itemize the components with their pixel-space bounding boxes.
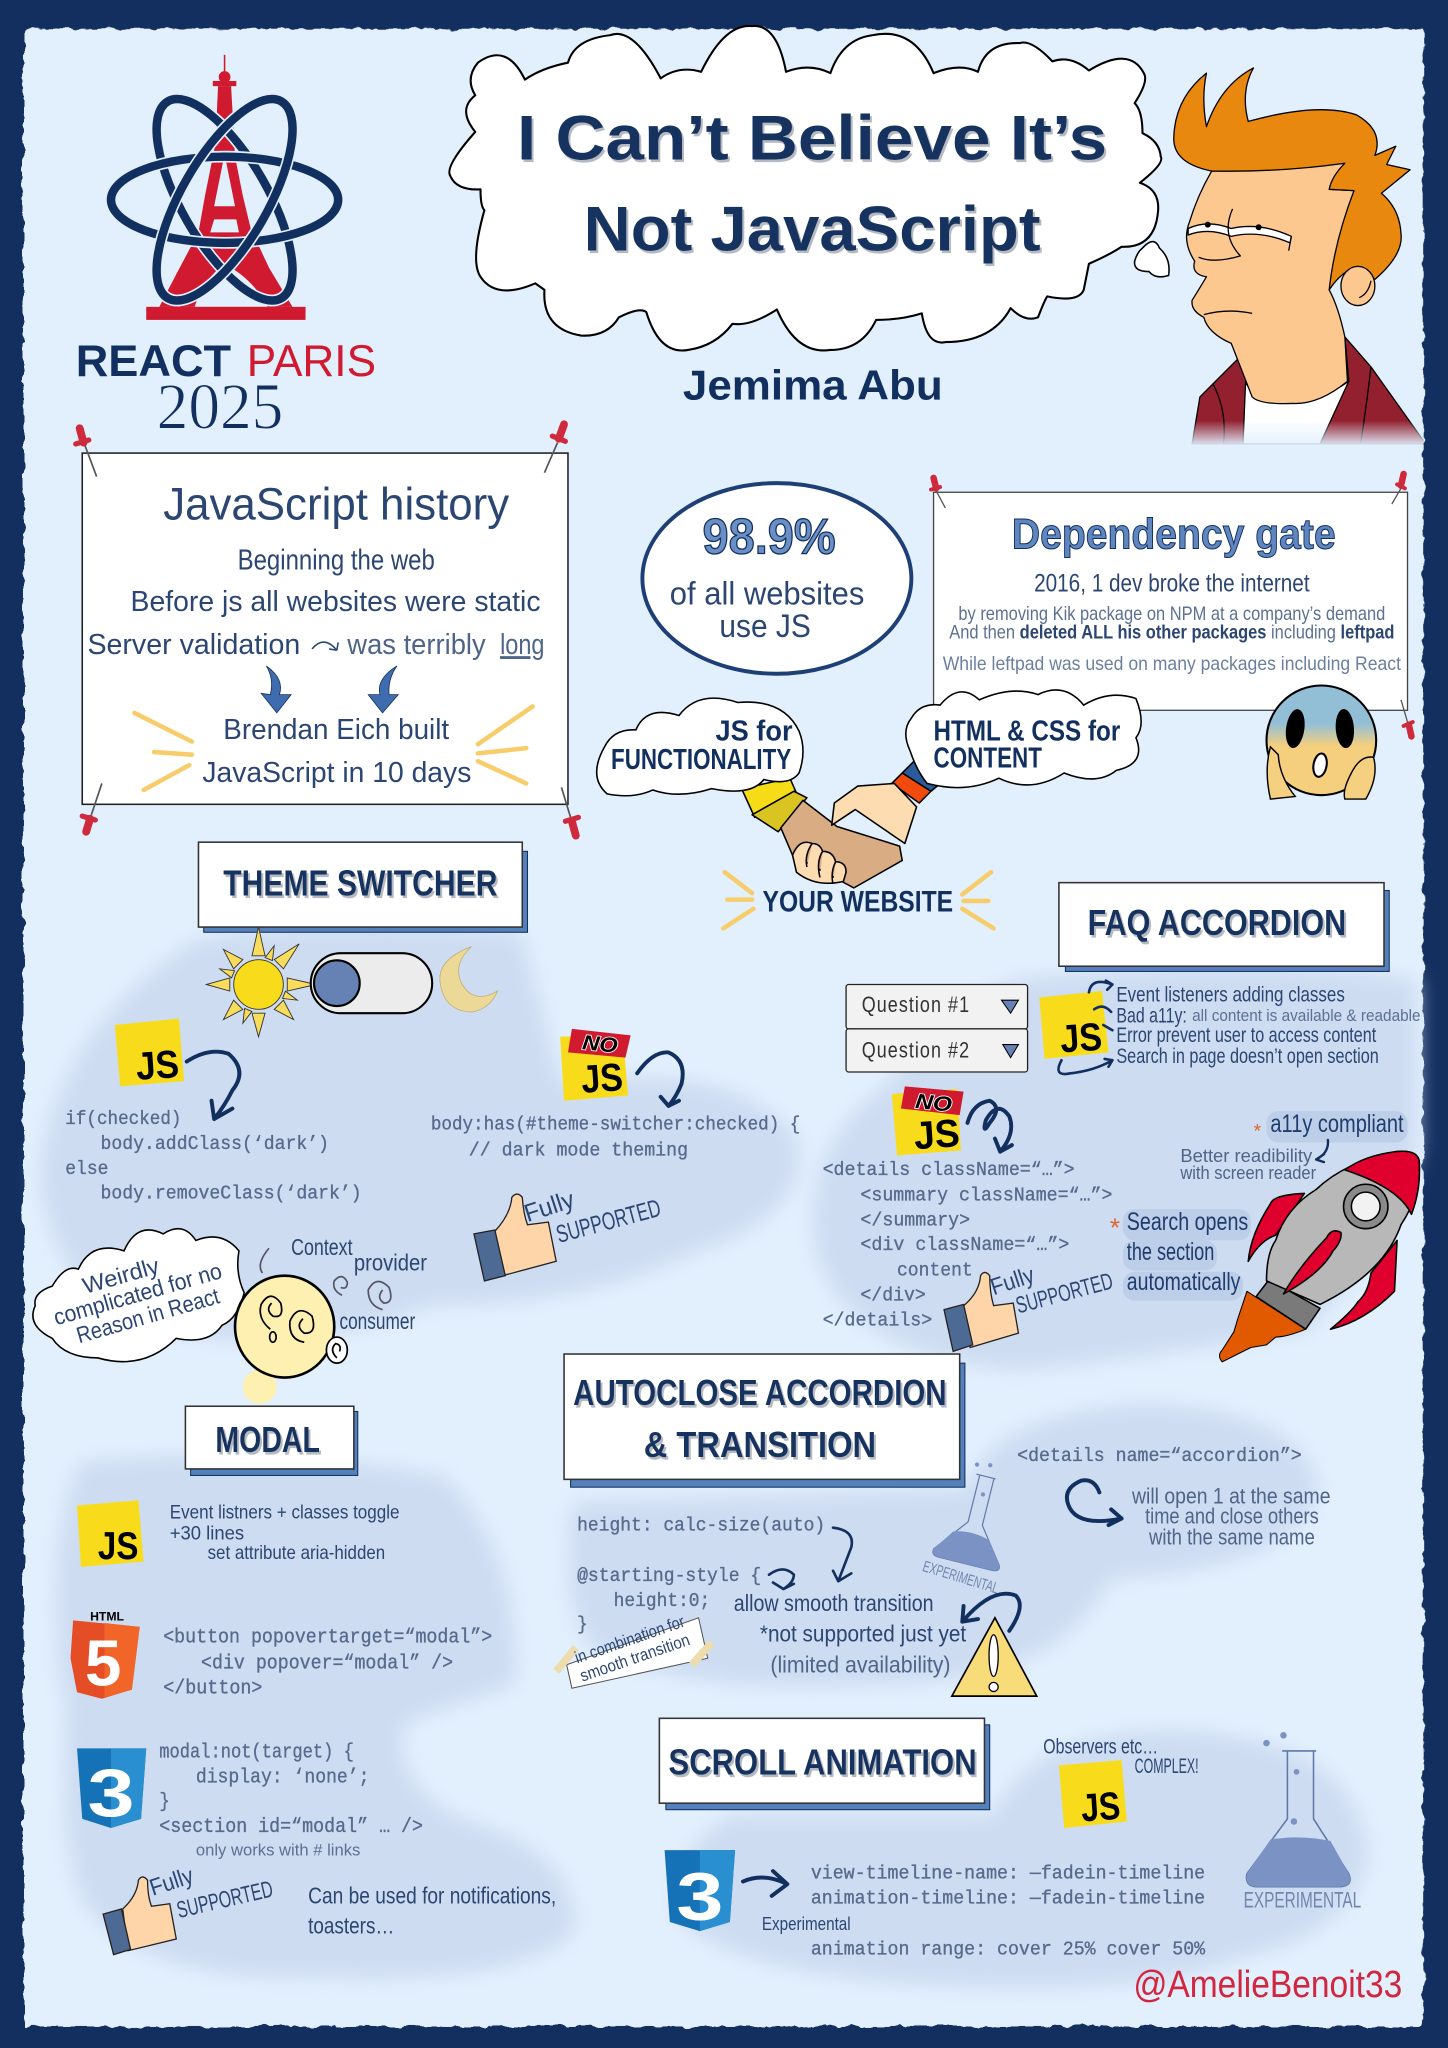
callout: search opens: Search opens: [1127, 1209, 1248, 1236]
context labels: consumer: [339, 1308, 415, 1334]
heading box: [564, 1354, 965, 1487]
NO JS badge: [560, 1029, 631, 1102]
callout: a11y compliant: Better readibility: [1180, 1145, 1313, 1166]
sparks: [723, 872, 994, 928]
code: details: </div>: [860, 1284, 926, 1306]
your website label: [723, 872, 994, 928]
fully supported label: SUPPORTED: [553, 1195, 664, 1249]
code: height: height: calc-size(auto): [577, 1514, 825, 1536]
icon: Eiffel tower: [146, 55, 306, 320]
JS drawbacks: Error prevent user to access content: [1116, 1024, 1376, 1047]
logo: React Paris 2025: [76, 55, 376, 443]
text: complicated for no: [50, 1257, 225, 1330]
code: HTML: <button popovertarget=“modal”>: [163, 1627, 492, 1650]
code: HTML: <div popover=“modal” />: [201, 1653, 453, 1676]
transition notes: [734, 1590, 967, 1678]
code: timeline: [762, 1862, 1205, 1961]
panel: JavaScript history: [76, 424, 578, 836]
heading box: FAQ ACCORDION: [1088, 902, 1346, 943]
NO JS badge: [892, 1086, 964, 1158]
cloud: weirdly complicated: [33, 1229, 244, 1362]
code: details: [823, 1159, 1112, 1331]
yellow cuff: [752, 791, 807, 832]
nose cap: [1345, 1151, 1419, 1214]
right hand: [832, 783, 917, 843]
NO JS badge: JS: [580, 1056, 624, 1102]
complex note: COMPLEX!: [1135, 1755, 1199, 1778]
section: autoclose accordion: [556, 1354, 1330, 1696]
squiggle arrow: [968, 1101, 1012, 1152]
heading box: MODAL: [215, 1419, 320, 1460]
code: height: }: [577, 1614, 588, 1636]
icon: sun: [206, 927, 316, 1037]
fully supported label: [146, 1862, 275, 1923]
heading: JavaScript history: [163, 479, 509, 530]
icon: big flask: [1246, 1732, 1350, 1887]
robe collar lines: [1213, 367, 1371, 444]
JS drawbacks: Bad a11y:: [1116, 1004, 1187, 1027]
title cloud: [449, 26, 1169, 350]
icon: HTML5: [71, 1610, 140, 1700]
section: scroll animation: [659, 1718, 1361, 1961]
accordion note: [1131, 1484, 1330, 1550]
code: details: <div className=“…”>: [860, 1234, 1069, 1256]
icon: CSS3: [77, 1748, 146, 1831]
stat caption: use JS: [719, 607, 811, 644]
blue sleeve: [902, 759, 939, 791]
JS drawbacks: [1116, 983, 1421, 1068]
handshake: [742, 759, 939, 888]
modal use note: Can be used for notifications,: [308, 1883, 556, 1909]
icon: thumbs up: [103, 1877, 176, 1955]
title line 1: I Can’t Believe It’s: [517, 103, 1107, 173]
NO JS badge: NO: [914, 1090, 953, 1117]
line: Before js all websites were static: [131, 586, 541, 618]
arrow: [743, 1871, 787, 1896]
JS notes: [170, 1502, 400, 1564]
text: FUNCTIONALITY: [611, 744, 791, 776]
code: timeline: animation-timeline: —fadein-timeline: [811, 1888, 1205, 1910]
arrow: [962, 1594, 1020, 1631]
observers note: Observers etc…: [1043, 1736, 1158, 1759]
accordion mock: [846, 985, 1028, 1072]
icon: moon: [440, 947, 497, 1012]
code: CSS version: [431, 1113, 800, 1162]
code: details name: <details name=“accordion”>: [1017, 1445, 1302, 1467]
author credit: @AmelieBenoit33: [1133, 1964, 1402, 2006]
code: HTML: [163, 1627, 492, 1701]
fully supported label: [521, 1186, 664, 1249]
code: details: content: [897, 1260, 973, 1282]
heading box: SCROLL ANIMATION: [669, 1741, 977, 1782]
JS notes: +30 lines: [170, 1522, 244, 1544]
line: Beginning the web: [238, 544, 435, 576]
code: height: height:0;: [614, 1590, 710, 1612]
code: CSS: [159, 1741, 423, 1859]
line: was terribly: [346, 629, 486, 661]
arrows: [769, 1528, 852, 1589]
JS badge: [115, 1018, 184, 1089]
eyes: [1283, 708, 1307, 749]
fully supported label: Fully: [146, 1862, 197, 1901]
pin top right: [544, 424, 565, 473]
arrow: [187, 1052, 239, 1119]
robe: [1192, 337, 1426, 444]
icon: warning: [952, 1618, 1037, 1696]
code: details: </details>: [823, 1309, 932, 1331]
arrows from JS: [1058, 981, 1112, 1074]
heading box: [185, 1406, 358, 1475]
stat number: 98.9%: [702, 509, 836, 565]
JS badge: JS: [1059, 1016, 1103, 1061]
callout: a11y compliant: [1179, 1111, 1408, 1183]
yellow sleeve: [742, 778, 799, 817]
callout: search opens: automatically: [1127, 1269, 1241, 1296]
cloud: HTML and CSS for content: [906, 690, 1141, 788]
curly arrow: [1067, 1480, 1122, 1525]
code: JS version: [65, 1108, 362, 1205]
left fin: [1248, 1193, 1304, 1261]
icon: rocket: [1220, 1151, 1419, 1362]
JS badge: JS: [1080, 1785, 1122, 1830]
icon: scared emoji: [1267, 685, 1376, 799]
icon: CSS3: [665, 1850, 735, 1934]
label: YOUR WEBSITE: [763, 885, 953, 918]
small thought puff: [1135, 242, 1169, 277]
line: While leftpad was used on many packages including React: [943, 653, 1401, 675]
accordion mock: Question #2: [862, 1038, 970, 1063]
code: CSS: modal:not(target) {: [159, 1741, 354, 1764]
cloud: [906, 690, 1141, 788]
JS notes: set attribute aria-hidden: [208, 1542, 385, 1564]
pin top left: [76, 428, 97, 477]
code: CSS: }: [159, 1791, 170, 1814]
callout: search opens: [1110, 1209, 1251, 1300]
icon: CSS3: 3: [87, 1756, 134, 1831]
code: details: </summary>: [860, 1209, 970, 1231]
context labels: Context: [291, 1234, 353, 1260]
fully supported label: Fully: [521, 1186, 578, 1228]
heading box: AUTOCLOSE ACCORDION: [573, 1372, 947, 1413]
arrow left: [261, 666, 291, 713]
icon: thumbs up: [474, 1194, 556, 1281]
fully supported label: [987, 1262, 1116, 1318]
text: Reason in React: [73, 1282, 223, 1348]
text: [44, 1236, 231, 1353]
panel: dependency gate: [931, 474, 1413, 736]
section: modal: [71, 1406, 556, 1955]
watercolor section washes: [39, 925, 1417, 1988]
code: timeline: view-timeline-name: —fadein-timeline: [811, 1862, 1205, 1884]
stat caption: of all websites: [670, 575, 864, 612]
left arm and hand: [781, 800, 902, 888]
callout: search opens: the section: [1127, 1239, 1214, 1266]
nozzle: [1256, 1280, 1320, 1329]
NO JS badge: NO: [581, 1031, 619, 1058]
JS badge: [1059, 1760, 1127, 1830]
pin bottom right: [1401, 700, 1413, 736]
stat bubble: [642, 483, 911, 674]
code: CSS: <section id=“modal” … />: [159, 1816, 423, 1839]
callout: a11y compliant: with screen reader: [1179, 1162, 1316, 1183]
paper: [82, 453, 568, 804]
speaker name: Jemima Abu: [683, 362, 943, 409]
pin bottom left: [82, 783, 102, 832]
NO JS badge: JS: [912, 1112, 961, 1158]
line: JavaScript in 10 days: [202, 757, 471, 789]
fully supported label: SUPPORTED: [174, 1876, 275, 1923]
code: timeline: Experimental: [762, 1913, 851, 1934]
line: 2016, 1 dev broke the internet: [1034, 570, 1310, 597]
JS drawbacks: all content is available & readable: [1192, 1006, 1421, 1025]
section: FAQ accordion: [823, 883, 1421, 1362]
code: height: @starting-style {: [577, 1565, 761, 1587]
JS badge: [77, 1500, 144, 1568]
line: Brendan Eich built: [223, 714, 449, 746]
icon: HTML5: 5: [85, 1627, 121, 1700]
accordion note: with the same name: [1148, 1525, 1315, 1550]
code: JS version: else: [65, 1158, 108, 1180]
fully supported label: SUPPORTED: [1013, 1268, 1116, 1318]
paper: [934, 492, 1408, 710]
callout: a11y compliant: *: [1253, 1120, 1261, 1142]
JS drawbacks: Event listeners adding classes: [1116, 983, 1345, 1006]
squinting eyes: [1188, 224, 1291, 243]
character: skeptical Fry: [1174, 68, 1426, 444]
small arrow: [312, 642, 338, 650]
context labels: [291, 1234, 427, 1334]
bubble: [642, 483, 911, 674]
sticky note: smooth transition: [577, 1630, 692, 1686]
logo year: 2025: [157, 371, 283, 443]
code: CSS: display: ‘none’;: [196, 1766, 370, 1789]
pin bottom right: [561, 787, 578, 836]
accordion mock: Question #1: [862, 992, 970, 1017]
pin top left: [931, 478, 945, 508]
face: [1187, 163, 1354, 404]
underlined word: long: [500, 629, 544, 661]
logo wordmark PARIS: PARIS: [247, 337, 376, 386]
heading box: [198, 842, 527, 932]
experimental label: EXPERIMENTAL: [921, 1558, 1001, 1598]
body: [1267, 1151, 1419, 1304]
line: Server validation: [87, 629, 300, 661]
code: JS version: if(checked): [65, 1108, 181, 1130]
transition notes: *not supported just yet: [760, 1620, 967, 1646]
hands: [1267, 747, 1375, 799]
text: HTML & CSS for: [934, 715, 1120, 747]
text: JS for: [716, 715, 793, 747]
window: [1344, 1184, 1388, 1229]
heading box: THEME SWITCHER: [223, 863, 497, 904]
code: details: <details className=“…”>: [823, 1159, 1075, 1181]
cloud shape: [449, 26, 1161, 350]
JS notes: Event listners + classes toggle: [170, 1502, 400, 1524]
transition notes: (limited availability): [770, 1652, 951, 1678]
JS badge: JS: [98, 1525, 138, 1568]
fade at bottom of character: [1182, 420, 1423, 447]
cloud: [33, 1229, 244, 1362]
JS badge: [1039, 991, 1109, 1061]
icon: HTML5: HTML: [90, 1610, 124, 1623]
fully supported label: Fully: [987, 1262, 1038, 1300]
arrow right: [368, 666, 398, 713]
code: CSS version: // dark mode theming: [469, 1140, 688, 1162]
pin top right: [1392, 474, 1405, 504]
section: theme switcher: [33, 842, 800, 1404]
icon: dizzy face: [235, 1248, 391, 1404]
logo wordmark REACT: REACT: [76, 337, 231, 386]
code: JS version: body.removeClass(‘dark’): [101, 1183, 362, 1205]
cloud: JS for functionality: [597, 698, 803, 796]
heading box: [1059, 883, 1389, 971]
code: CSS: only works with # links: [196, 1840, 360, 1859]
heading box: [659, 1718, 990, 1810]
code: HTML: </button>: [163, 1678, 262, 1701]
code: JS version: body.addClass(‘dark’): [101, 1133, 329, 1155]
line: And then deleted ALL his other packages including leftpad: [949, 621, 1394, 643]
icon: CSS3: 3: [676, 1859, 723, 1934]
code: CSS version: body:has(#theme-switcher:checked) {: [431, 1113, 800, 1135]
code: height: [577, 1514, 825, 1636]
accordion note: time and close others: [1145, 1504, 1319, 1529]
facial lines: [1199, 209, 1371, 315]
mouth: [1312, 752, 1329, 778]
icon: toggle: [311, 953, 432, 1013]
t-shirt: [1243, 381, 1349, 444]
accordion note: will open 1 at the same: [1131, 1484, 1330, 1509]
title line 2: Not JavaScript: [584, 195, 1041, 265]
center fin: [1283, 1231, 1341, 1294]
modal use note: [308, 1883, 556, 1939]
heading: Dependency gate: [1012, 510, 1336, 558]
transition notes: allow smooth transition: [734, 1590, 934, 1616]
icon: atom orbits: [111, 80, 338, 320]
experimental label: EXPERIMENTAL: [1244, 1888, 1361, 1913]
icon: thumbs up: [944, 1272, 1018, 1351]
right fin: [1330, 1240, 1397, 1329]
callout: a11y compliant: a11y compliant: [1270, 1111, 1404, 1138]
text: Weirdly: [80, 1252, 163, 1299]
JS badge: JS: [134, 1043, 180, 1089]
JS drawbacks: Search in page doesn’t open section: [1116, 1045, 1379, 1068]
flame: [1220, 1291, 1306, 1362]
code: details: <summary className=“…”>: [860, 1185, 1112, 1207]
sticky note: [556, 1612, 712, 1688]
hair: [1174, 68, 1410, 290]
fingers: [793, 842, 846, 884]
icon: small flask: [932, 1455, 1023, 1572]
sticky note: in combination for: [572, 1612, 687, 1667]
arrow: [637, 1052, 683, 1106]
modal use note: toasters…: [308, 1913, 394, 1939]
ear: [1341, 266, 1375, 306]
sparks: [134, 706, 533, 790]
callout: search opens: *: [1110, 1213, 1120, 1243]
orange cuff: [892, 773, 931, 803]
heading box: & TRANSITION: [644, 1424, 876, 1465]
window glass: [1351, 1192, 1380, 1221]
text: CONTENT: [934, 743, 1042, 775]
context labels: provider: [354, 1249, 427, 1275]
face: [1267, 685, 1376, 795]
cloud: [597, 698, 803, 796]
code: timeline: animation range: cover 25% cover 50%: [811, 1939, 1205, 1961]
